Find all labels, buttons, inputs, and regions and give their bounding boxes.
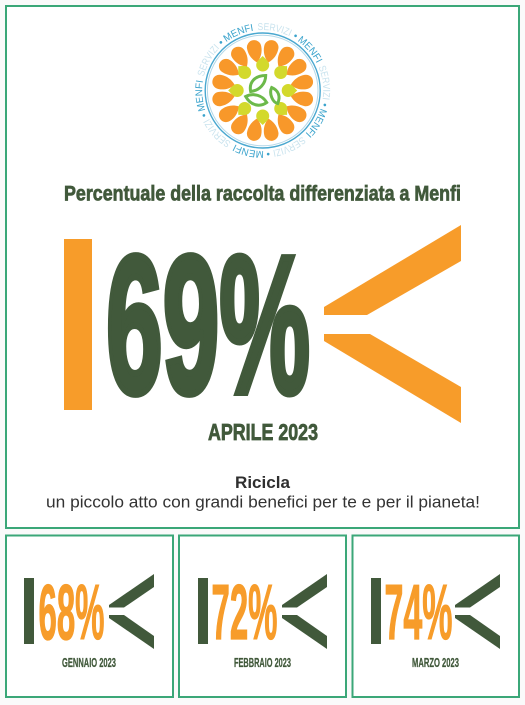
month label: April 2023: APRILE 2023	[208, 419, 318, 445]
panel: February	[179, 536, 346, 697]
icon: green bar	[198, 578, 208, 644]
logo: Menfi Servizi: SERVIZI	[319, 66, 330, 100]
logo: Menfi Servizi: SERVIZI	[198, 44, 219, 76]
panel: January: 68%	[38, 568, 104, 656]
icon: orange chevron	[324, 225, 461, 423]
icon: green chevron	[109, 574, 154, 649]
logo: Menfi Servizi: •	[220, 41, 222, 44]
logo: Menfi Servizi: •	[266, 152, 270, 156]
logo: Menfi Servizi: SERVIZI	[203, 119, 230, 147]
logo: Menfi Servizi: MENFI	[195, 80, 206, 112]
text: tagline: un piccolo atto con grandi benefici per te e per il pianeta!	[46, 494, 480, 512]
icon: orange bar	[64, 239, 92, 410]
panel: January	[6, 536, 173, 697]
panel: February: 72%	[212, 568, 278, 656]
logo: Menfi Servizi	[195, 23, 330, 158]
icon: green bar	[371, 578, 381, 644]
logo: Menfi Servizi: SERVIZI	[274, 137, 306, 157]
logo: Menfi Servizi: •	[324, 104, 326, 106]
panel: main April figure	[5, 5, 520, 529]
icon: green chevron	[282, 574, 327, 649]
big number 69%: 69%	[106, 216, 310, 434]
icon: green chevron	[455, 574, 500, 649]
logo: Menfi Servizi: •	[294, 34, 297, 38]
month label: February 2023: FEBBRAIO 2023	[234, 656, 291, 670]
logo: Menfi Servizi: •	[202, 114, 206, 117]
month label: March 2023: MARZO 2023	[412, 656, 459, 670]
logo: Menfi Servizi: MENFI	[298, 36, 322, 63]
icon: green bar	[24, 578, 34, 644]
logo: Menfi Servizi: MENFI	[306, 108, 327, 138]
month label: January 2023: GENNAIO 2023	[62, 656, 116, 670]
logo: Menfi Servizi: SERVIZI	[258, 23, 292, 36]
heading: Ricicla: Ricicla	[235, 474, 291, 492]
logo: Menfi Servizi: MENFI	[223, 24, 253, 42]
logo: Menfi Servizi: MENFI	[232, 144, 264, 158]
panel: March	[352, 536, 519, 697]
